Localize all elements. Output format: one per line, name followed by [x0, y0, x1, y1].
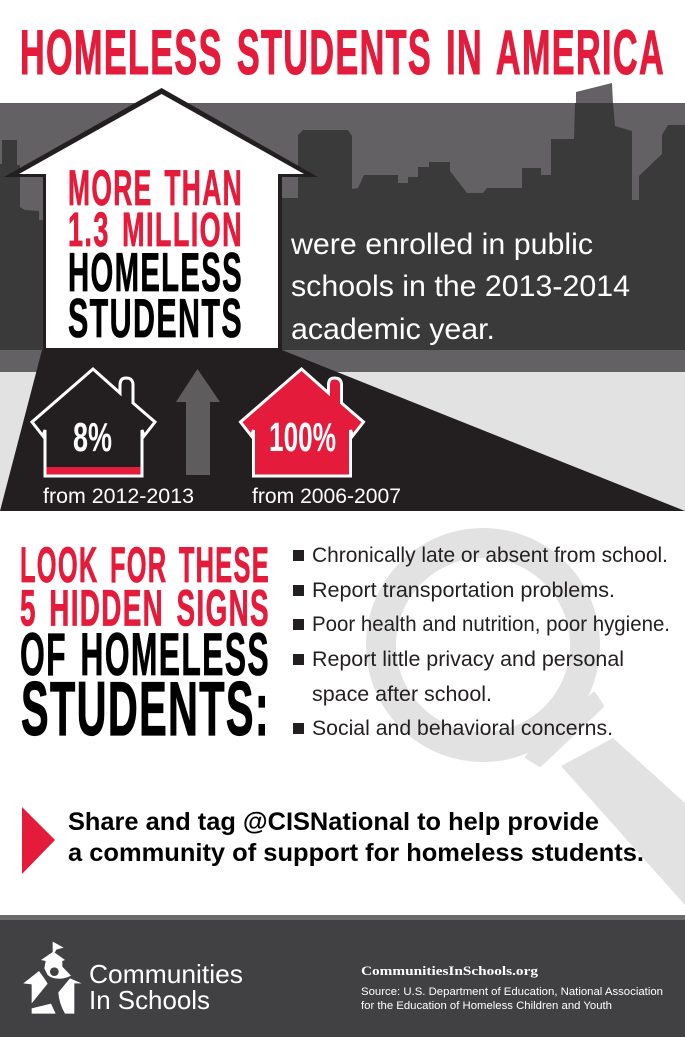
list: hidden signs: space after school. — [312, 683, 492, 706]
headline in house: 1.3 MILLION — [68, 204, 243, 257]
panel: footer — [0, 915, 685, 1037]
list: hidden signs — [293, 544, 670, 740]
headline in house: STUDENTS — [68, 287, 243, 349]
headline in house — [68, 160, 243, 349]
dark perspective shadow — [0, 350, 685, 511]
enrolment text: were enrolled in public — [290, 228, 593, 261]
source note: Source: U.S. Department of Education, National Association — [361, 986, 663, 998]
enrolment text — [290, 228, 630, 346]
icon: 100 percent house: 100% — [269, 414, 336, 460]
headline in house: MORE THAN — [68, 160, 243, 216]
heading: hidden signs: STUDENTS: — [21, 667, 270, 752]
list: hidden signs: Poor health and nutrition, poor hygiene. — [312, 613, 670, 636]
skyline right — [282, 103, 685, 350]
icon: large house — [4, 88, 318, 350]
icon: 100 percent house — [240, 369, 364, 476]
source note: for the Education of Homeless Children and Youth — [361, 1000, 612, 1012]
logo wordmark: Communities — [89, 959, 243, 989]
panel: city skyline banner — [0, 83, 685, 511]
list: hidden signs: Social and behavioral concerns. — [312, 717, 613, 740]
heading: hidden signs: LOOK FOR THESE — [20, 537, 270, 593]
label: from 2006-2007: from 2006-2007 — [252, 485, 401, 508]
list: hidden signs: Report little privacy and personal — [312, 648, 624, 671]
website: CommunitiesInSchools.org — [361, 963, 539, 978]
list: hidden signs: Report transportation problems. — [312, 579, 615, 602]
heading: hidden signs: 5 HIDDEN SIGNS — [20, 580, 270, 636]
heading: hidden signs: OF HOMELESS — [20, 621, 270, 688]
list: hidden signs: Chronically late or absent from school. — [312, 544, 668, 567]
logo wordmark — [89, 959, 243, 1015]
call to action — [68, 808, 644, 867]
source note — [361, 986, 663, 1012]
icon: 8 percent house — [32, 369, 155, 476]
call to action: Share and tag @CISNational to help provide — [68, 808, 599, 836]
heading: hidden signs — [20, 537, 270, 752]
logo wordmark: In Schools — [89, 985, 210, 1015]
headline in house: HOMELESS — [68, 241, 243, 303]
enrolment text: academic year. — [291, 313, 495, 346]
icon: 8 percent house: 8% — [73, 414, 112, 460]
icon: red arrow — [22, 807, 55, 874]
call to action: a community of support for homeless students. — [68, 839, 644, 867]
enrolment text: schools in the 2013-2014 — [291, 270, 630, 303]
icon: magnifying glass — [381, 543, 685, 905]
skyline left — [0, 140, 44, 350]
icon: Communities In Schools logo — [23, 942, 82, 1014]
arrow: upward increase — [176, 369, 220, 475]
label: from 2012-2013: from 2012-2013 — [43, 485, 194, 508]
